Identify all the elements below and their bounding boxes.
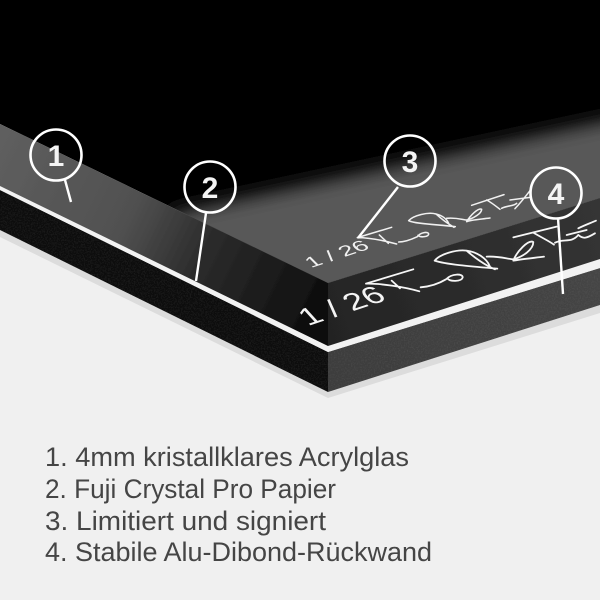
callout 4: dibond backing — [530, 168, 582, 294]
layer 4: dibond side faces — [0, 190, 600, 395]
legend text — [45, 442, 432, 567]
legend item 2: 2. Fuji Crystal Pro Papier — [45, 474, 336, 504]
signature on acrylic front edge — [366, 221, 596, 291]
layered panel illustration — [0, 0, 600, 398]
layer 1: acrylic right face — [328, 198, 600, 346]
legend item 1: 1. 4mm kristallklares Acrylglas — [45, 442, 409, 472]
layer 1: acrylic left face — [0, 124, 328, 346]
callout 3: limited and signed — [358, 136, 436, 238]
callout 2: paper — [184, 162, 236, 281]
legend item 4: 4. Stabile Alu-Dibond-Rückwand — [45, 537, 432, 567]
edition number on top face: 1 / 26 — [300, 237, 374, 271]
top face of acrylic — [0, 0, 600, 283]
legend item 3: 3. Limitiert und signiert — [45, 506, 327, 536]
layer 2: white paper edge — [0, 186, 600, 352]
callout 3: limited and signed: 3 — [402, 146, 418, 179]
callout 4: dibond backing: 4 — [548, 178, 565, 211]
shadow layer under panel — [0, 230, 600, 398]
callout 2: paper: 2 — [202, 172, 218, 205]
edition number on acrylic front edge: 1 / 26 — [291, 281, 392, 331]
callout 1: acrylic — [30, 130, 82, 202]
signature on top face — [357, 191, 530, 244]
callout 1: acrylic: 1 — [48, 140, 64, 173]
